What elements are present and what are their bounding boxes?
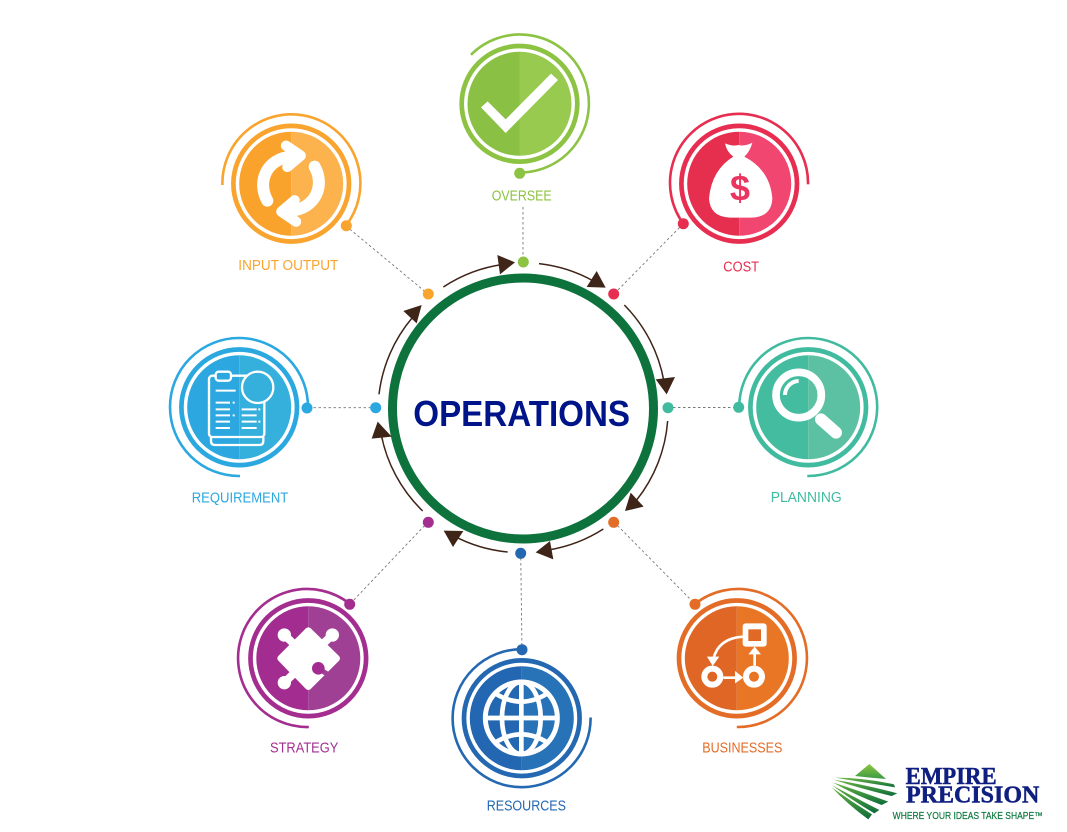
icon: refresh arrows [263, 146, 319, 222]
icon: globe [485, 682, 557, 754]
icon: magnifying glass [776, 372, 836, 433]
logo: empire precision: PRECISION [906, 783, 1039, 809]
panel: planning [733, 338, 877, 506]
label: input output: INPUT OUTPUT [238, 258, 338, 274]
label: oversee: OVERSEE [492, 188, 552, 204]
label: resources: RESOURCES [487, 799, 566, 815]
icon: checklist document [209, 372, 273, 445]
icon: money bag: $ [730, 167, 750, 208]
icon: money bag [709, 143, 772, 218]
icon: check mark [481, 74, 558, 133]
panel: cost [670, 114, 808, 276]
label: cost: COST [723, 260, 759, 276]
logo: empire precision: EMPIRE [906, 764, 997, 790]
icon: process flow [704, 623, 767, 685]
panel: input output [222, 114, 360, 274]
panel: requirement [170, 338, 312, 507]
label: requirement: REQUIREMENT [192, 491, 288, 507]
panel: resources [453, 644, 591, 815]
title: operations: OPERATIONS [413, 393, 630, 434]
cycle arrows around the central circle [372, 255, 675, 559]
connector dots on the cycle [370, 256, 674, 559]
logo: empire precision: WHERE YOUR IDEAS TAKE SHAPE™ [893, 811, 1043, 822]
label: businesses: BUSINESSES [702, 741, 782, 757]
label: strategy: STRATEGY [270, 741, 339, 757]
central operations circle [392, 278, 654, 539]
panel: strategy [238, 589, 366, 757]
panel: oversee [462, 35, 589, 204]
logo: empire precision [832, 764, 1043, 822]
icon: puzzle piece [278, 628, 339, 689]
label: planning: PLANNING [771, 490, 842, 506]
panel: businesses [679, 589, 807, 757]
